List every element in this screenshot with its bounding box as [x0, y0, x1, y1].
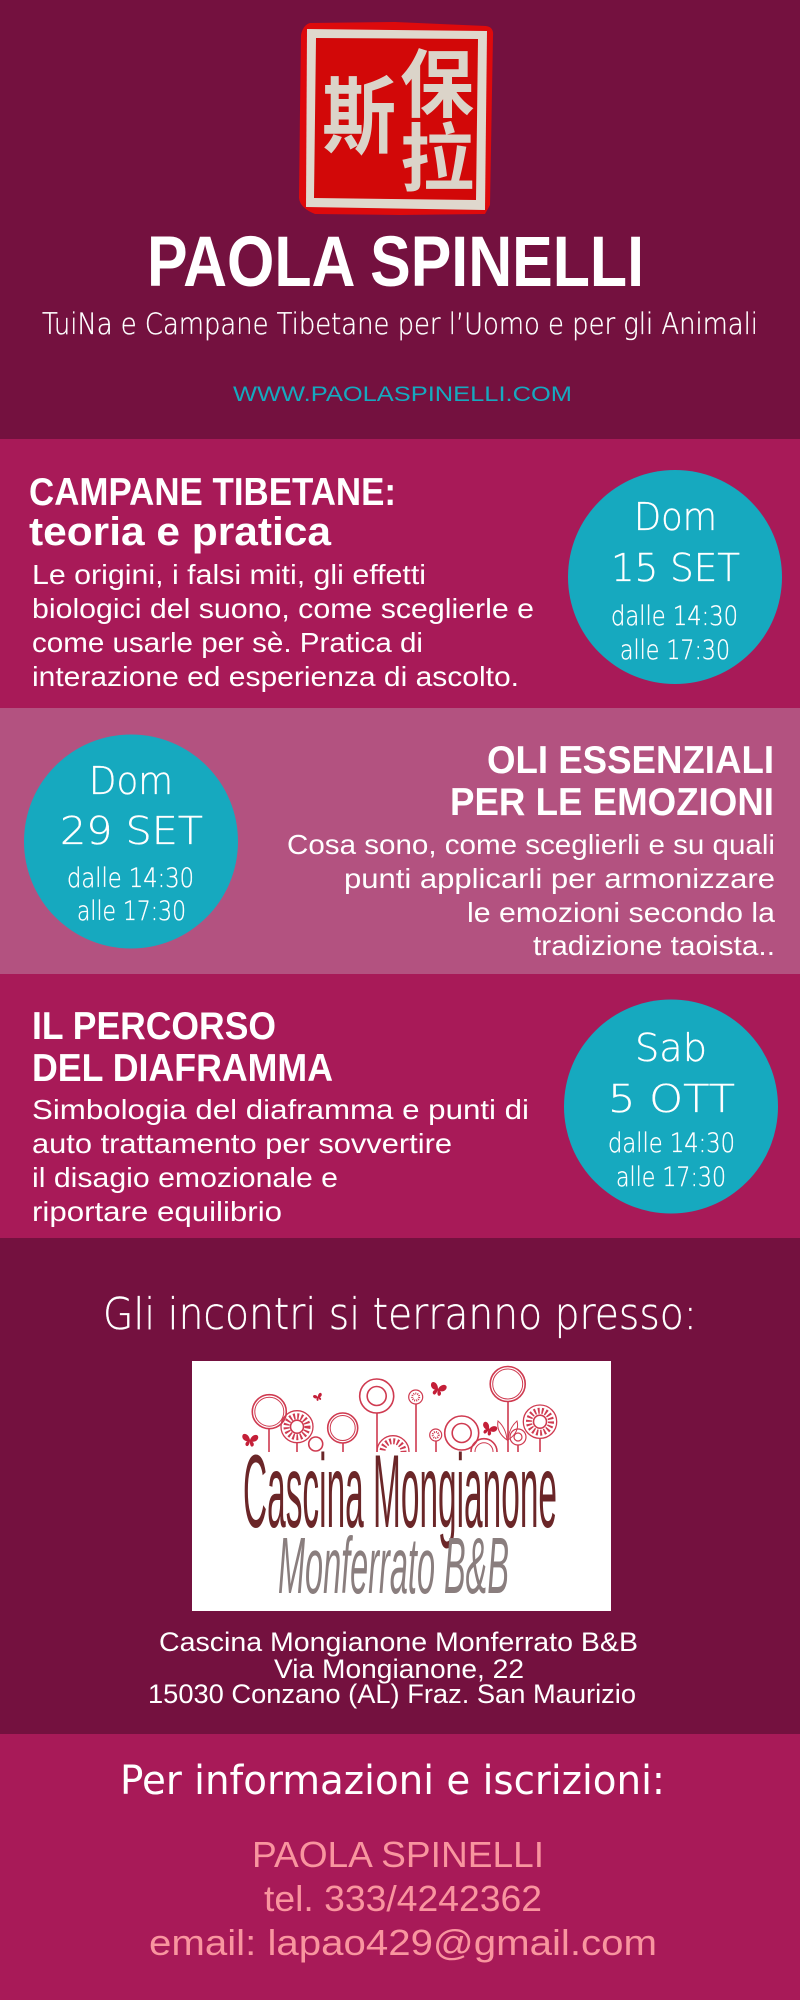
icon: flowers and butterflies — [242, 1366, 558, 1452]
text block: il disagio emozionale e — [32, 1162, 338, 1193]
date badge — [564, 1000, 778, 1214]
date badge: Sab — [635, 1026, 707, 1070]
panel: il percorso del diaframma — [0, 974, 800, 1238]
date badge: 15 SET — [611, 546, 740, 590]
heading — [450, 739, 774, 824]
icon: red seal with Chinese characters: 保 — [400, 26, 474, 133]
heading: DEL DIAFRAMMA — [32, 1047, 333, 1090]
text block: tradizione taoista.. — [533, 930, 775, 961]
address — [148, 1627, 638, 1709]
date badge: Dom — [89, 759, 173, 803]
contact details: email: lapao429@gmail.com — [149, 1922, 657, 1963]
website: WWW.PAOLASPINELLI.COM — [233, 383, 572, 406]
date badge: dalle 14:30 — [67, 863, 194, 894]
date badge: alle 17:30 — [77, 896, 186, 927]
date badge: Dom — [634, 495, 717, 539]
date badge — [568, 470, 782, 684]
address: 15030 Conzano (AL) Fraz. San Maurizio — [148, 1679, 636, 1709]
address: Cascina Mongianone Monferrato B&B — [159, 1627, 638, 1657]
date badge: alle 17:30 — [616, 1162, 726, 1193]
heading: CAMPANE TIBETANE: — [29, 471, 396, 514]
panel: oli essenziali — [0, 708, 800, 974]
title: PAOLA SPINELLI — [147, 223, 644, 302]
contact details: tel. 333/4242362 — [264, 1878, 542, 1919]
icon: red seal with Chinese characters: 拉 — [400, 100, 474, 207]
text block: come usarle per sè. Pratica di — [32, 627, 423, 658]
date badge: alle 17:30 — [620, 635, 730, 666]
heading: teoria e pratica — [29, 510, 332, 554]
icon: red seal with Chinese characters: 斯 — [322, 50, 396, 170]
date badge: dalle 14:30 — [611, 601, 738, 632]
text block: auto trattamento per sovvertire — [32, 1128, 452, 1159]
text block: Le origini, i falsi miti, gli effetti — [32, 559, 426, 590]
heading: IL PERCORSO — [32, 1005, 276, 1048]
heading — [32, 1005, 333, 1090]
date badge: 29 SET — [60, 809, 203, 853]
icon: red seal with Chinese characters — [299, 22, 493, 215]
text block: biologici del suono, come sceglierle e — [32, 593, 534, 624]
date badge — [24, 734, 238, 948]
text block: Simbologia del diaframma e punti di — [32, 1094, 529, 1125]
panel: contacts — [0, 1734, 800, 2000]
text block: Cosa sono, come sceglierli e su quali — [287, 829, 775, 860]
text block — [32, 559, 534, 692]
heading: PER LE EMOZIONI — [450, 781, 774, 824]
text block — [287, 829, 775, 961]
text block — [32, 1094, 529, 1227]
panel: venue — [106, 1296, 692, 1708]
text block: interazione ed esperienza di ascolto. — [32, 661, 519, 692]
heading — [29, 471, 396, 554]
panel: campane tibetane — [0, 439, 800, 708]
text block: le emozioni secondo la — [467, 897, 775, 928]
panel: header — [0, 0, 800, 439]
contact details — [149, 1834, 657, 1963]
contacts heading: Per informazioni e iscrizioni: — [120, 1758, 665, 1804]
date badge: dalle 14:30 — [608, 1128, 735, 1159]
venue logo — [192, 1361, 611, 1611]
text block: riportare equilibrio — [32, 1196, 282, 1227]
heading: OLI ESSENZIALI — [487, 739, 774, 782]
address: Via Mongianone, 22 — [274, 1654, 524, 1684]
contact details: PAOLA SPINELLI — [252, 1834, 544, 1875]
text block: punti applicarli per armonizzare — [344, 863, 775, 894]
date badge: 5 OTT — [608, 1077, 735, 1121]
venue heading: Gli incontri si terranno presso: — [103, 1289, 697, 1340]
